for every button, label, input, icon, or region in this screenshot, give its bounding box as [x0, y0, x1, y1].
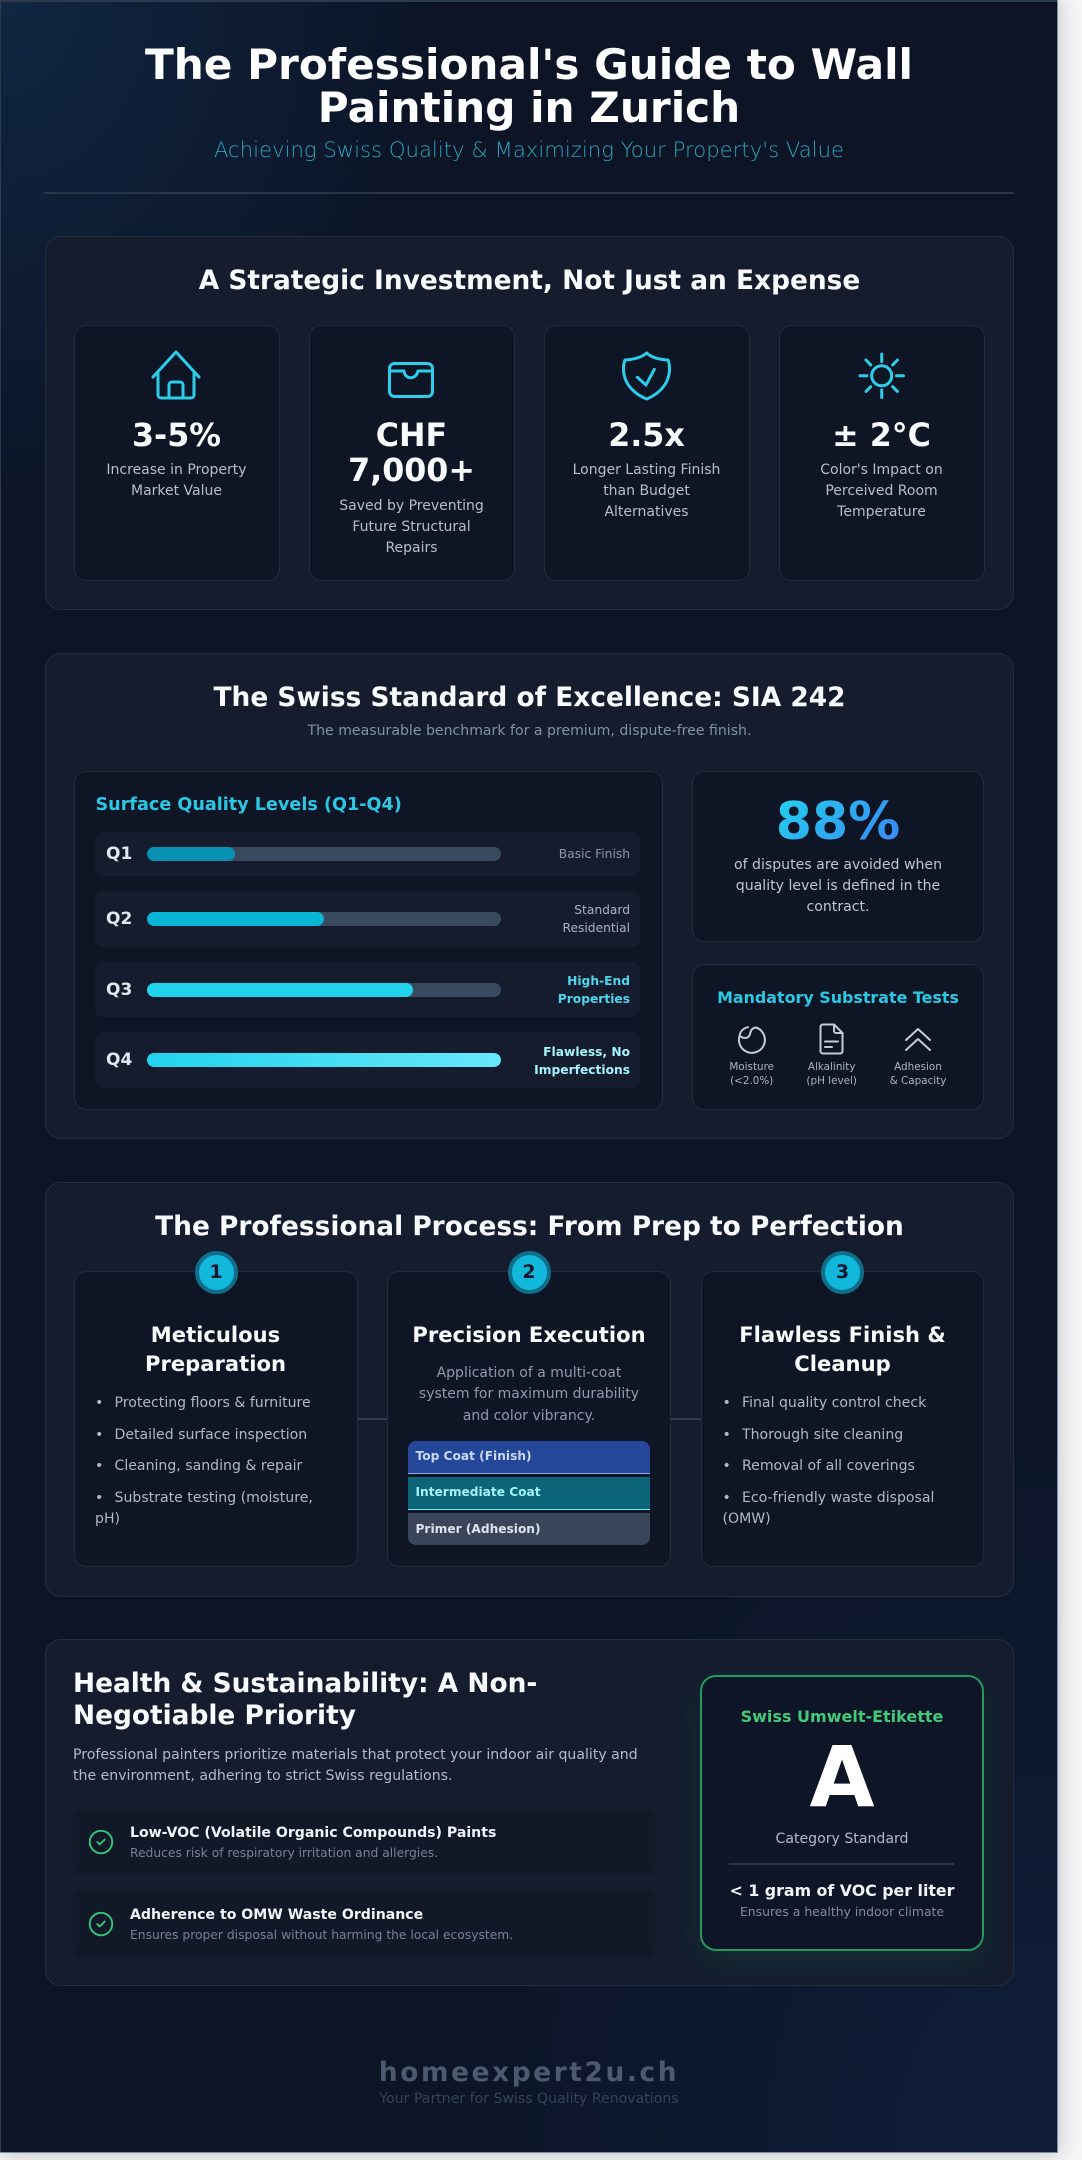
bar: 50% [147, 912, 501, 926]
layer: primer [408, 1513, 650, 1545]
stat label: Saved by Preventing [339, 498, 484, 514]
step title [739, 1322, 946, 1376]
level name: Q4 [106, 1050, 132, 1070]
section heading: Health & Sustainability: A Non- [73, 1668, 537, 1699]
test label: moisture: (<2.0%) [730, 1075, 773, 1087]
title: Painting in Zurich [318, 82, 740, 132]
icon: moisture [738, 1026, 766, 1054]
row: Q4 [95, 1032, 640, 1088]
panel: surface quality levels [74, 771, 662, 1110]
icon: house [151, 350, 201, 400]
step 1 card [74, 1271, 358, 1567]
stat label: Market Value [131, 483, 222, 499]
row: Q1 [95, 832, 640, 876]
stat card: durability [544, 325, 750, 581]
test label: alkalinity: (pH level) [806, 1075, 857, 1087]
stat label: than Budget [603, 483, 690, 499]
bar: 75% [147, 982, 501, 996]
layer: primer: Primer (Adhesion) [416, 1522, 541, 1536]
panel: disputes statistic [692, 771, 984, 942]
level description: Basic Finish [559, 847, 630, 861]
step title: Cleanup [794, 1350, 891, 1376]
stat label: Repairs [385, 540, 438, 556]
step checklist [95, 1394, 313, 1527]
item title: Adherence to OMW Waste Ordinance [130, 1907, 423, 1923]
item description: Reduces risk of respiratory irritation and allergies. [130, 1846, 438, 1860]
statistic caption: of disputes are avoided when [734, 856, 942, 872]
step checklist: Eco-friendly waste disposal [742, 1490, 934, 1506]
badge title: Swiss Umwelt-Etikette [741, 1707, 943, 1726]
level description: Residential [563, 921, 630, 935]
title [145, 40, 913, 132]
stat value: 3-5% [132, 418, 221, 454]
step checklist [722, 1394, 934, 1527]
layer: top coat [408, 1441, 650, 1474]
level description: Standard [574, 903, 630, 917]
step title: Precision Execution [412, 1322, 646, 1346]
test label: moisture: Moisture [729, 1061, 774, 1073]
icon: document [820, 1024, 844, 1054]
section description: The measurable benchmark for a premium, dispute-free finish. [308, 723, 751, 739]
step checklist: Removal of all coverings [742, 1458, 915, 1474]
statistic caption: contract. [806, 898, 870, 914]
stat label: Perceived Room [825, 483, 938, 499]
step checklist: • [722, 1490, 731, 1506]
section heading: The Swiss Standard of Excellence: SIA 242 [214, 682, 845, 713]
level description [558, 974, 630, 1006]
level description: Properties [558, 992, 630, 1006]
test label: adhesion: & Capacity [890, 1075, 946, 1087]
step checklist: Substrate testing (moisture, [114, 1490, 313, 1506]
step checklist: • [722, 1394, 731, 1410]
level description [534, 1045, 630, 1077]
brand: homeexpert2u.ch [379, 2057, 679, 2088]
step checklist: • [95, 1458, 103, 1474]
item: OMW [73, 1890, 655, 1956]
item: low VOC [73, 1810, 655, 1875]
step checklist: (OMW) [722, 1511, 771, 1527]
icon: sun [858, 352, 905, 399]
panel: substrate tests [692, 964, 984, 1110]
stat label: Future Structural [352, 519, 471, 535]
icon: check [88, 1830, 114, 1854]
step checklist: Protecting floors & furniture [114, 1394, 311, 1410]
test label: adhesion: Adhesion [894, 1061, 942, 1073]
section heading: A Strategic Investment, Not Just an Expense [199, 265, 860, 296]
stat card: savings [308, 325, 514, 581]
badge grade: A [809, 1728, 874, 1826]
icon: shield check [622, 351, 671, 400]
statistic caption [734, 856, 942, 914]
step checklist: Detailed surface inspection [114, 1426, 307, 1442]
connector [356, 1418, 386, 1420]
step 2 card [387, 1271, 671, 1567]
step checklist: • [722, 1458, 731, 1474]
step title: Meticulous [151, 1322, 280, 1346]
step number [821, 1250, 864, 1294]
step description: and color vibrancy. [463, 1408, 595, 1424]
badge: Swiss Umwelt-Etikette [700, 1675, 984, 1951]
level description: Imperfections [534, 1063, 630, 1077]
layer: intermediate coat [408, 1477, 650, 1510]
bar: 25% [147, 847, 501, 861]
VOC note: Ensures a healthy indoor climate [740, 1904, 944, 1919]
tests heading: Mandatory Substrate Tests [717, 988, 959, 1007]
stat value: ± 2°C [832, 418, 931, 454]
step checklist: • [95, 1490, 103, 1506]
stat value [348, 418, 475, 488]
section paragraph: Professional painters prioritize materials that protect your indoor air quality and [73, 1747, 638, 1763]
step title: Preparation [145, 1350, 286, 1376]
test label: adhesion [890, 1061, 946, 1087]
panel: professional process [44, 1182, 1014, 1597]
step checklist: • [95, 1426, 103, 1442]
section heading [73, 1668, 537, 1731]
test label: alkalinity: Alkalinity [808, 1061, 856, 1073]
stat label: Longer Lasting Finish [573, 462, 720, 478]
panel: health and sustainability [44, 1639, 1014, 1986]
icon: chevrons up [905, 1028, 931, 1051]
stat label: Color's Impact on [820, 462, 943, 478]
layer: intermediate coat: Intermediate Coat [416, 1485, 541, 1499]
stat value: CHF [376, 418, 447, 454]
layer: top coat: Top Coat (Finish) [416, 1449, 532, 1463]
stat label: Increase in Property [106, 462, 247, 478]
section heading: The Professional Process: From Prep to Perfection [155, 1211, 904, 1242]
stat value: 2.5x [608, 418, 685, 454]
stat card: temperature [778, 325, 984, 581]
test label: alkalinity [806, 1061, 857, 1087]
bar: 100% [147, 1053, 501, 1067]
level name: Q3 [106, 980, 132, 1000]
stat value: 7,000+ [348, 452, 475, 488]
step number [508, 1250, 550, 1294]
step number: 3 [836, 1260, 849, 1282]
VOC limit: < 1 gram of VOC per liter [730, 1881, 954, 1900]
step checklist: • [95, 1394, 103, 1410]
subtitle: Achieving Swiss Quality & Maximizing Your Property's Value [214, 136, 844, 162]
row: Q2 [95, 891, 640, 947]
test label: moisture [729, 1061, 774, 1087]
statistic caption: quality level is defined in the [736, 878, 940, 894]
level description [563, 903, 630, 935]
section heading: Negotiable Priority [73, 1700, 356, 1731]
header [145, 40, 913, 162]
step description: Application of a multi-coat [437, 1365, 621, 1381]
coat layers diagram [408, 1441, 650, 1545]
level name: Q2 [106, 909, 132, 929]
stat label [106, 462, 247, 499]
step description: system for maximum durability [419, 1386, 639, 1402]
step checklist: Final quality control check [742, 1394, 926, 1410]
divider [729, 1863, 954, 1865]
icon: check [88, 1912, 114, 1936]
icon: wallet box [388, 362, 434, 398]
level description: High-End [567, 974, 630, 988]
level description: Flawless, No [543, 1045, 630, 1059]
step number [194, 1250, 238, 1294]
footer [379, 2057, 679, 2107]
panel: SIA 242 standard [44, 653, 1014, 1139]
step checklist: • [722, 1426, 731, 1442]
step 3 card [701, 1271, 984, 1567]
step number: 1 [209, 1260, 223, 1282]
section paragraph [73, 1747, 638, 1784]
step checklist: Thorough site cleaning [742, 1426, 903, 1442]
item title: Low-VOC (Volatile Organic Compounds) Paints [130, 1825, 496, 1841]
section paragraph: the environment, adhering to strict Swiss regulations. [73, 1768, 453, 1784]
step checklist: Cleaning, sanding & repair [114, 1458, 302, 1474]
stat label: Alternatives [604, 504, 689, 520]
stat label: Temperature [837, 504, 926, 520]
stat label [573, 462, 720, 520]
row: Q3 [95, 962, 640, 1017]
step checklist: pH) [95, 1511, 120, 1527]
panel: strategic investment [44, 236, 1014, 610]
quality heading: Surface Quality Levels (Q1-Q4) [96, 795, 402, 815]
tagline: Your Partner for Swiss Quality Renovations [379, 2091, 679, 2107]
title: The Professional's Guide to Wall [145, 40, 913, 89]
item description: Ensures proper disposal without harming the local ecosystem. [130, 1928, 513, 1942]
badge category: Category Standard [776, 1831, 908, 1847]
stat label [339, 498, 484, 556]
step title: Flawless Finish & [739, 1322, 946, 1346]
level name: Q1 [106, 844, 132, 864]
step number: 2 [522, 1260, 536, 1282]
connector [670, 1418, 700, 1420]
step title [145, 1322, 286, 1376]
stat label [820, 462, 943, 520]
big number: 88% [776, 792, 900, 852]
step description [419, 1365, 639, 1424]
stat card: property value [74, 325, 280, 581]
